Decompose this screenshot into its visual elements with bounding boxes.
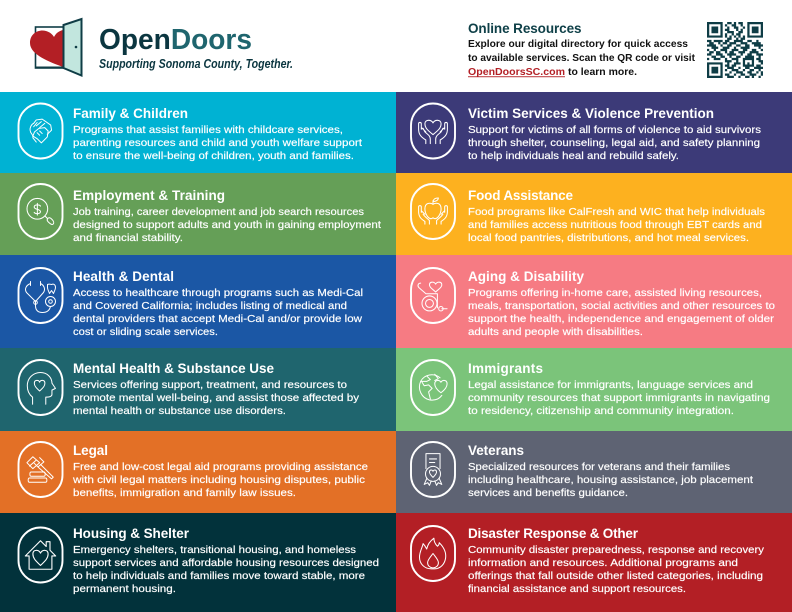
description bbox=[468, 379, 770, 417]
description: information and resources. Additional programs and bbox=[468, 557, 738, 569]
heading: Family & Children bbox=[73, 106, 188, 121]
description: local food pantries, distributions, and hot meal services. bbox=[468, 232, 749, 244]
description: Emergency shelters, transitional housing, and homeless bbox=[73, 544, 356, 556]
heading: Housing & Shelter bbox=[73, 526, 190, 541]
description: offerings that fall outside other listed categories, including bbox=[468, 570, 763, 582]
icon: flame with drop bbox=[411, 526, 455, 581]
heading: Food Assistance bbox=[468, 188, 573, 203]
logo: open door with heart bbox=[30, 19, 82, 76]
icon: magnifier with dollar bbox=[18, 184, 62, 239]
QR code bbox=[707, 23, 763, 77]
description: and financial stability. bbox=[73, 232, 183, 244]
description: designed to support adults and youth in gaining employment bbox=[73, 219, 381, 231]
panel: Food Assistance bbox=[396, 173, 792, 255]
description: meals, transportation, social activities and other resources to bbox=[468, 300, 775, 312]
description: Free and low-cost legal aid programs providing assistance bbox=[73, 461, 368, 473]
description bbox=[468, 206, 765, 244]
description: to help individuals and families move toward stable, more bbox=[73, 570, 365, 582]
icon: stethoscope and tooth bbox=[18, 268, 62, 323]
panel: Employment & Training bbox=[0, 173, 396, 255]
description: Job training, career development and job search resources bbox=[73, 206, 364, 218]
description bbox=[73, 287, 363, 338]
description bbox=[468, 124, 761, 162]
description: dental providers that accept Medi-Cal and/or provide low bbox=[73, 313, 362, 325]
online resources text block: Online Resources bbox=[468, 21, 582, 36]
panel: Victim Services & Violence Prevention bbox=[396, 92, 792, 173]
description: through shelter, counseling, legal aid, and safety planning bbox=[468, 137, 760, 149]
description: financial assistance and support resources. bbox=[468, 583, 686, 595]
panel: Immigrants bbox=[396, 348, 792, 431]
description bbox=[468, 544, 765, 595]
description: promote mental well-being, and assist those affected by bbox=[73, 392, 360, 404]
panel: Health & Dental bbox=[0, 255, 396, 348]
description: to help individuals heal and rebuild safely. bbox=[468, 150, 679, 162]
heading: Veterans bbox=[468, 443, 524, 458]
description bbox=[468, 287, 775, 338]
description: Community disaster preparedness, response and recovery bbox=[468, 544, 765, 556]
description: Programs offering in-home care, assisted living resources, bbox=[468, 287, 762, 299]
online resources text block: Explore our digital directory for quick access bbox=[468, 38, 688, 50]
description: support services and affordable housing resources designed bbox=[73, 557, 379, 569]
panel: Aging & Disability bbox=[396, 255, 792, 348]
icon: hands holding heart bbox=[411, 104, 455, 158]
panel: Mental Health & Substance Use bbox=[0, 348, 396, 431]
description: Legal assistance for immigrants, language services and bbox=[468, 379, 753, 391]
tagline: Supporting Sonoma County, Together. bbox=[99, 57, 293, 71]
online resources text block bbox=[468, 21, 695, 78]
heading: Employment & Training bbox=[73, 188, 225, 203]
panel: Legal bbox=[0, 431, 396, 513]
panel: Housing & Shelter bbox=[0, 513, 396, 612]
description: to residency, citizenship and community integration. bbox=[468, 405, 734, 417]
description bbox=[73, 544, 379, 595]
logo wordmark: OpenDoors bbox=[99, 24, 252, 56]
online resources text block: to available services. Scan the QR code or visit bbox=[468, 52, 695, 64]
description: and Covered California; includes listing of medical and bbox=[73, 300, 347, 312]
heading: Disaster Response & Other bbox=[468, 526, 639, 541]
heading: Legal bbox=[73, 443, 108, 458]
description: Access to healthcare through programs such as Medi-Cal bbox=[73, 287, 363, 299]
icon: head with heart bbox=[18, 360, 62, 415]
description: and families access nutritious food through EBT cards and bbox=[468, 219, 762, 231]
description: to ensure the well-being of children, youth and families. bbox=[73, 150, 354, 162]
panel: Family & Children bbox=[0, 92, 396, 173]
icon: gavel bbox=[18, 442, 62, 497]
icon: hands holding apple bbox=[411, 184, 455, 239]
icon: globe with heart bbox=[411, 360, 455, 415]
description: Specialized resources for veterans and their families bbox=[468, 461, 730, 473]
description: with civil legal matters including housing disputes, public bbox=[72, 474, 365, 486]
heading: Health & Dental bbox=[73, 269, 174, 284]
description: Programs that assist families with childcare services, bbox=[73, 124, 343, 136]
heading: Immigrants bbox=[468, 361, 543, 376]
description: including healthcare, housing assistance, job placement bbox=[468, 474, 753, 486]
online resources text block: OpenDoorsSC.com bbox=[468, 66, 565, 78]
online resources text block: to learn more. bbox=[568, 66, 637, 78]
icon: hands bbox=[18, 104, 62, 158]
description: parenting resources and child and youth welfare support bbox=[73, 137, 362, 149]
panel: Veterans bbox=[396, 431, 792, 513]
icon: certificate with ribbon bbox=[411, 442, 455, 497]
description: benefits, immigration and family law issues. bbox=[73, 487, 296, 499]
description: adults and people with disabilities. bbox=[468, 326, 643, 338]
description bbox=[73, 379, 360, 417]
heading: Victim Services & Violence Prevention bbox=[468, 106, 714, 121]
description: Support for victims of all forms of violence to aid survivors bbox=[468, 124, 761, 136]
heading: Mental Health & Substance Use bbox=[73, 361, 274, 376]
heading: Aging & Disability bbox=[468, 269, 584, 284]
description: support the health, independence and engagement of older bbox=[468, 313, 775, 325]
icon: house with heart bbox=[18, 528, 62, 582]
description bbox=[73, 206, 381, 244]
description bbox=[73, 124, 362, 162]
description: community resources that support immigrants in navigating bbox=[468, 392, 770, 404]
description: services and benefits guidance. bbox=[468, 487, 628, 499]
description: Food programs like CalFresh and WIC that help individuals bbox=[468, 206, 765, 218]
description: Services offering support, treatment, and resources to bbox=[73, 379, 347, 391]
description: cost or sliding scale services. bbox=[73, 326, 218, 338]
description bbox=[468, 461, 753, 499]
description: permanent housing. bbox=[73, 583, 176, 595]
description bbox=[72, 461, 368, 499]
description: mental health or substance use disorders. bbox=[73, 405, 286, 417]
panel: Disaster Response & Other bbox=[396, 513, 792, 612]
icon: wheelchair with heart bbox=[411, 268, 455, 323]
